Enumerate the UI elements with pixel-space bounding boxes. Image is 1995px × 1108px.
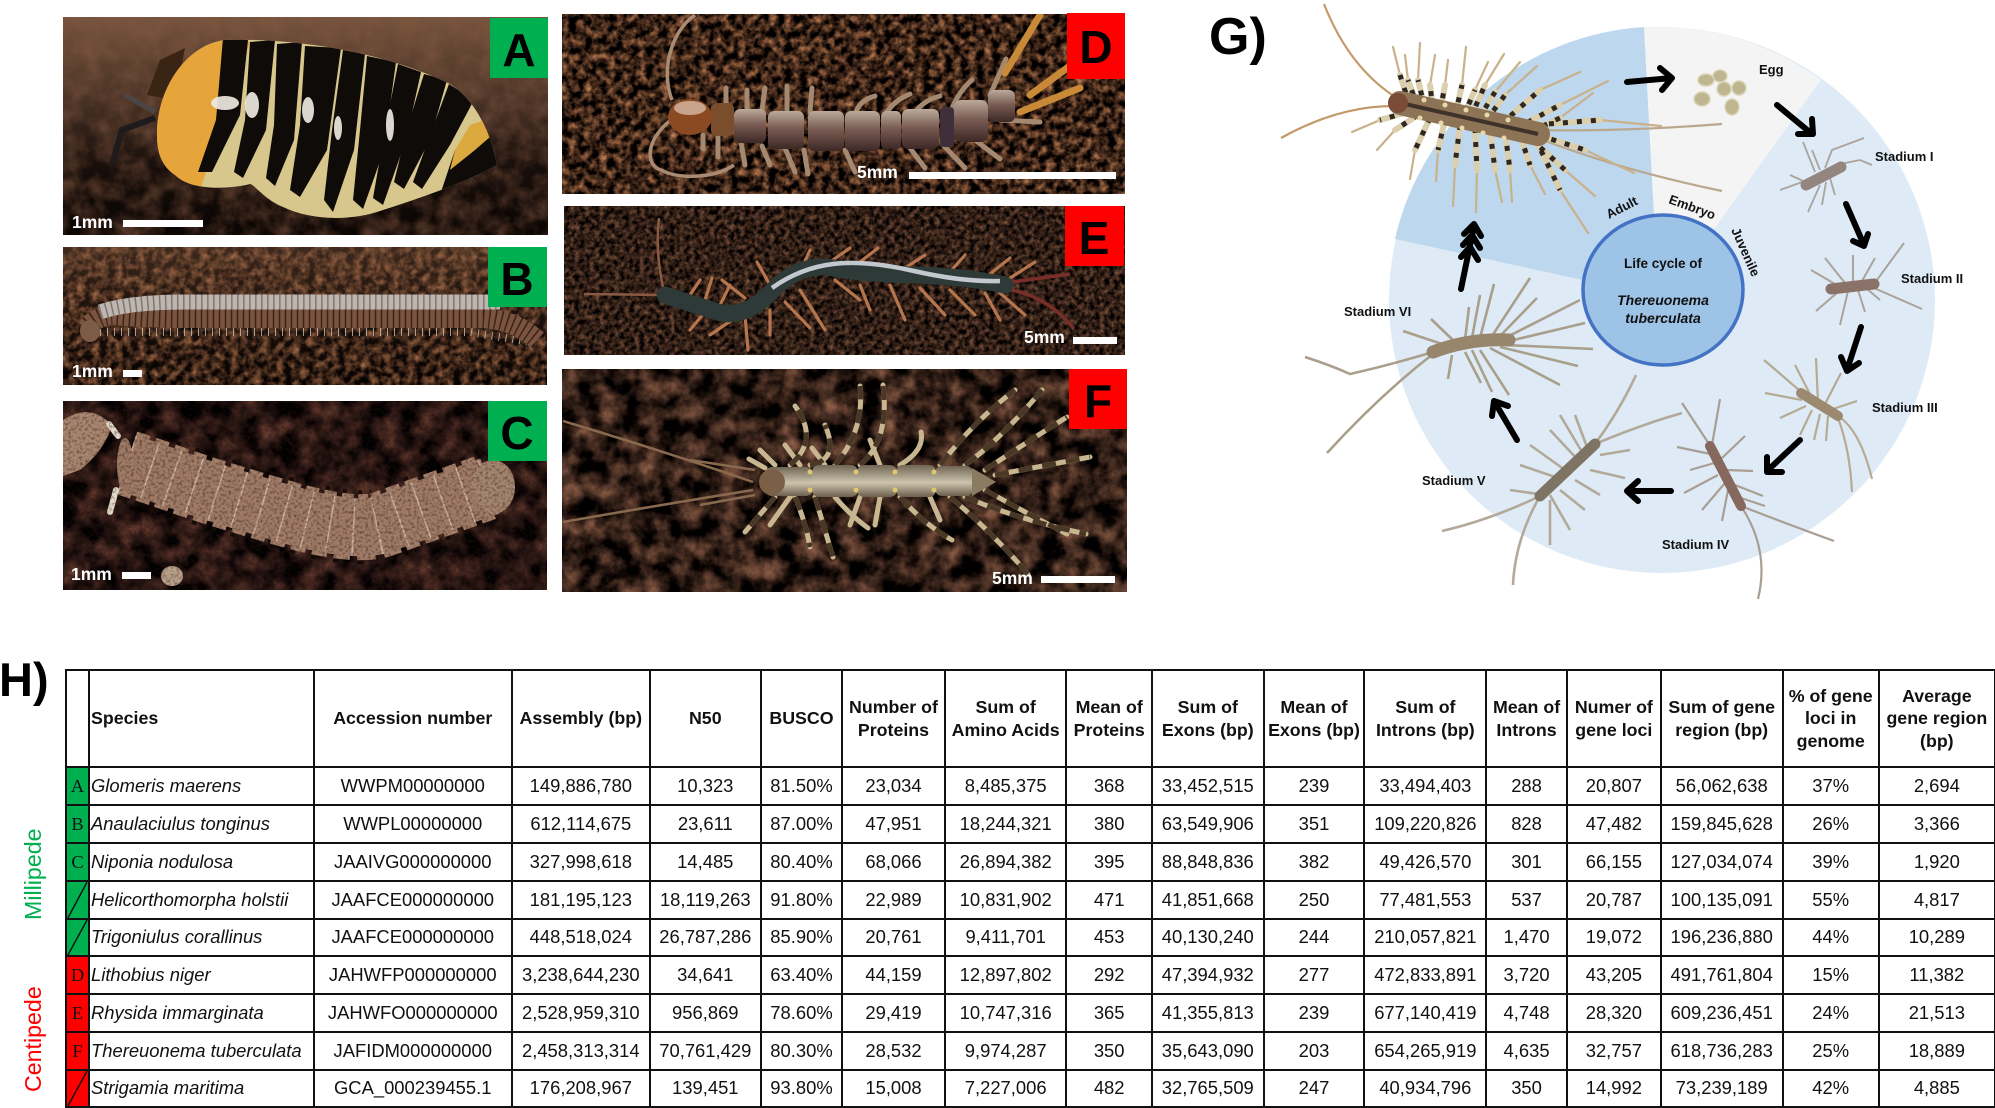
table header row: gene region (1886, 708, 1987, 728)
row: Niponia nodulosa: 127,034,074 (1671, 851, 1773, 872)
stadium I specimen (1780, 138, 1872, 212)
row: Strigamia maritima: Strigamia maritima (91, 1077, 244, 1098)
row: Trigoniulus corallinus: 10,289 (1909, 926, 1965, 947)
row: Niponia nodulosa: 395 (1094, 851, 1125, 872)
triple-headed arrow stadium VI to adult (1461, 224, 1481, 289)
badge E: E (1079, 212, 1109, 264)
table header row: Accession number (333, 708, 492, 728)
arrows between stages (1461, 68, 1868, 501)
row: Lithobius niger: 12,897,802 (960, 964, 1052, 985)
table header row: Mean of (1076, 697, 1143, 717)
adult sector (1395, 27, 1654, 280)
row: Niponia nodulosa: 26,894,382 (960, 851, 1052, 872)
row: Helicorthomorpha holstii: Helicorthomorpha holstii (91, 889, 288, 910)
scale bar A: 1mm (72, 212, 113, 232)
stage names: Adult (1604, 193, 1641, 222)
stadium labels: Stadium III (1872, 400, 1938, 415)
arrow egg to stadium I (1777, 105, 1813, 134)
arrow stadium I to II (1846, 204, 1868, 246)
row: Glomeris maerens: 37% (1812, 775, 1849, 796)
panel C: Niponia nodulosa photo (63, 401, 547, 590)
row: Helicorthomorpha holstii (67, 882, 1960, 918)
stage names (1604, 192, 1763, 279)
row: Rhysida immarginata: 29,419 (865, 1002, 922, 1023)
row: Rhysida immarginata: 41,355,813 (1162, 1002, 1254, 1023)
juvenile sector disc (1389, 27, 1935, 573)
row: Rhysida immarginata: 4,748 (1504, 1002, 1550, 1023)
row: Anaulaciulus tonginus: 159,845,628 (1671, 813, 1773, 834)
badge C (488, 401, 547, 461)
row: Thereuonema tuberculata: 203 (1299, 1040, 1329, 1061)
row: Glomeris maerens: 23,034 (865, 775, 922, 796)
row: Lithobius niger: 43,205 (1586, 964, 1642, 985)
row: Anaulaciulus tonginus: Anaulaciulus tonginus (91, 813, 270, 834)
row: Niponia nodulosa: JAAIVG000000000 (334, 851, 491, 872)
arrow stadium II to III (1841, 327, 1861, 371)
row: Trigoniulus corallinus: 448,518,024 (530, 926, 632, 947)
badge D (1067, 13, 1125, 79)
row: Strigamia maritima: 247 (1299, 1077, 1329, 1098)
row: Lithobius niger: 472,833,891 (1374, 964, 1476, 985)
row: Lithobius niger: 47,394,932 (1162, 964, 1254, 985)
row: Strigamia maritima: 139,451 (672, 1077, 739, 1098)
row: Glomeris maerens (67, 768, 1960, 804)
panel F: Thereuonema tuberculata photo (562, 369, 1127, 592)
table: genome statistics (65, 669, 1995, 1108)
row: Lithobius niger: 11,382 (1909, 964, 1964, 985)
row: Rhysida immarginata: 609,236,451 (1671, 1002, 1773, 1023)
row: Lithobius niger: Lithobius niger (91, 964, 211, 985)
row: Thereuonema tuberculata: Thereuonema tuberculata (91, 1040, 302, 1061)
panel D: Lithobius niger photo (562, 14, 1125, 194)
row: Thereuonema tuberculata: 9,974,287 (965, 1040, 1047, 1061)
row: Lithobius niger: 3,238,644,230 (522, 964, 640, 985)
row: Anaulaciulus tonginus: B (71, 814, 84, 834)
table header row: Sum of (1178, 697, 1238, 717)
row: Glomeris maerens: 56,062,638 (1676, 775, 1768, 796)
row: Lithobius niger: 292 (1094, 964, 1125, 985)
brown centipede (650, 15, 1085, 176)
row: Lithobius niger: 44,159 (865, 964, 922, 985)
row: Lithobius niger: D (71, 965, 84, 985)
row: Rhysida immarginata: 365 (1094, 1002, 1125, 1023)
row: Thereuonema tuberculata: 35,643,090 (1162, 1040, 1254, 1061)
centre circle: Life cycle of (1624, 256, 1703, 271)
row: Anaulaciulus tonginus: 3,366 (1914, 813, 1960, 834)
row: Thereuonema tuberculata (67, 1033, 1965, 1069)
row: Niponia nodulosa (67, 844, 1960, 880)
row: Glomeris maerens: 239 (1299, 775, 1329, 796)
row: Strigamia maritima: 350 (1511, 1077, 1542, 1098)
badge F (1069, 369, 1127, 429)
row: Rhysida immarginata: 21,513 (1909, 1002, 1965, 1023)
row: Glomeris maerens: 2,694 (1914, 775, 1960, 796)
scale bar C: 1mm (71, 564, 112, 584)
row: Helicorthomorpha holstii: 250 (1299, 889, 1329, 910)
row: Lithobius niger: 63.40% (770, 964, 833, 985)
row: Anaulaciulus tonginus: 18,244,321 (960, 813, 1052, 834)
row: Strigamia maritima: 4,885 (1914, 1077, 1960, 1098)
row: Niponia nodulosa: Niponia nodulosa (91, 851, 233, 872)
stadium labels: Egg (1759, 62, 1784, 77)
table header row: % of gene (1789, 686, 1873, 706)
row: Glomeris maerens: 149,886,780 (530, 775, 632, 796)
centre circle: tuberculata (1625, 310, 1701, 326)
row: Trigoniulus corallinus: 40,130,240 (1162, 926, 1254, 947)
row: Thereuonema tuberculata: 4,635 (1504, 1040, 1550, 1061)
row: Anaulaciulus tonginus: 47,951 (865, 813, 922, 834)
row: Trigoniulus corallinus: 210,057,821 (1374, 926, 1476, 947)
table header row (91, 686, 1987, 751)
row: Rhysida immarginata: 24% (1812, 1002, 1849, 1023)
panel B: Anaulaciulus tonginus photo (63, 247, 547, 385)
table header row: Number of (849, 697, 938, 717)
scale bar F: 5mm (992, 568, 1033, 588)
row: Glomeris maerens: 81.50% (770, 775, 833, 796)
arrow stadium V to VI (1492, 401, 1517, 440)
row: Helicorthomorpha holstii: 4,817 (1914, 889, 1960, 910)
stadium VI specimen (1305, 278, 1593, 453)
stadium labels: Stadium I (1875, 149, 1934, 164)
row: Anaulaciulus tonginus: 63,549,906 (1162, 813, 1254, 834)
panel G: life cycle diagram (1281, 4, 1963, 599)
row: Helicorthomorpha holstii: 77,481,553 (1379, 889, 1471, 910)
row: Thereuonema tuberculata: JAFIDM000000000 (334, 1040, 492, 1061)
stadium labels: Stadium V (1422, 473, 1486, 488)
eggs (1694, 70, 1746, 115)
row: Trigoniulus corallinus: 85.90% (770, 926, 833, 947)
table header row: Proteins (858, 720, 929, 740)
badge A: A (502, 24, 536, 76)
row: Thereuonema tuberculata: 654,265,919 (1374, 1040, 1476, 1061)
row: Strigamia maritima: 176,208,967 (530, 1077, 632, 1098)
stadium labels: Stadium VI (1344, 304, 1411, 319)
row: Niponia nodulosa: 1,920 (1914, 851, 1960, 872)
table header row: Exons (bp) (1162, 720, 1254, 740)
row: Trigoniulus corallinus: 19,072 (1586, 926, 1642, 947)
row: Niponia nodulosa: 66,155 (1586, 851, 1642, 872)
badge B (488, 247, 547, 307)
slender millipede body (80, 302, 537, 342)
flat-backed millipede body (63, 412, 515, 586)
stadium V specimen (1442, 375, 1682, 585)
row: Glomeris maerens: WWPM00000000 (341, 775, 485, 796)
row: Thereuonema tuberculata: 28,532 (865, 1040, 922, 1061)
row: Niponia nodulosa: 14,485 (677, 851, 733, 872)
row: Trigoniulus corallinus: 453 (1094, 926, 1125, 947)
row: Strigamia maritima: 42% (1812, 1077, 1849, 1098)
panel A: Glomeris maerens photo (63, 17, 548, 235)
table header row: Mean of (1493, 697, 1560, 717)
scale bar D: 5mm (857, 162, 898, 182)
group label Centipede: Centipede (20, 986, 46, 1092)
table header row: Sum of gene (1668, 697, 1775, 717)
table header row: loci in (1805, 708, 1856, 728)
stadium II specimen (1811, 243, 1922, 325)
stadium labels (1344, 62, 1963, 552)
table header row: Sum of (1395, 697, 1455, 717)
row: Lithobius niger: 277 (1299, 964, 1329, 985)
row: Niponia nodulosa: 327,998,618 (530, 851, 632, 872)
table header row: Introns (1496, 720, 1557, 740)
row: Strigamia maritima: GCA_000239455.1 (334, 1077, 491, 1098)
row: Strigamia maritima: 32,765,509 (1162, 1077, 1254, 1098)
row: Rhysida immarginata: 956,869 (672, 1002, 739, 1023)
row: Rhysida immarginata (67, 995, 1965, 1031)
centre circle (1583, 215, 1743, 365)
scale bar C (71, 564, 151, 584)
row: Strigamia maritima: 482 (1094, 1077, 1125, 1098)
row: Trigoniulus corallinus (67, 920, 1965, 955)
row: Thereuonema tuberculata: 350 (1094, 1040, 1125, 1061)
row: Niponia nodulosa: 49,426,570 (1379, 851, 1471, 872)
house centipede (563, 385, 1090, 574)
arrow stadium IV to V (1627, 481, 1671, 501)
row: Trigoniulus corallinus: 44% (1812, 926, 1849, 947)
row: Niponia nodulosa: 88,848,836 (1162, 851, 1254, 872)
row: Trigoniulus corallinus: 20,761 (865, 926, 922, 947)
row: Strigamia maritima: 7,227,006 (965, 1077, 1047, 1098)
row: Helicorthomorpha holstii: 100,135,091 (1671, 889, 1773, 910)
panel label H: H) (0, 653, 49, 706)
row: Lithobius niger: 15% (1812, 964, 1849, 985)
dark centipede (584, 218, 1074, 350)
badge B: B (500, 253, 534, 305)
row: Glomeris maerens: 33,452,515 (1162, 775, 1254, 796)
panel label G: G) (1209, 8, 1267, 66)
stadium IV specimen (1677, 399, 1834, 599)
row: Anaulaciulus tonginus: 351 (1299, 813, 1329, 834)
row: Strigamia maritima (67, 1071, 1960, 1106)
row: Niponia nodulosa: 68,066 (865, 851, 922, 872)
row: Helicorthomorpha holstii: 10,831,902 (960, 889, 1052, 910)
row: Anaulaciulus tonginus: 26% (1812, 813, 1849, 834)
table header row: Average (1902, 686, 1972, 706)
row: Anaulaciulus tonginus (67, 806, 1960, 842)
row: Rhysida immarginata: 10,747,316 (960, 1002, 1052, 1023)
row: Trigoniulus corallinus: 9,411,701 (965, 926, 1046, 947)
row: Anaulaciulus tonginus: 47,482 (1586, 813, 1642, 834)
scale bar D (857, 162, 1116, 182)
row: Thereuonema tuberculata: 2,458,313,314 (522, 1040, 640, 1061)
row: Anaulaciulus tonginus: 380 (1094, 813, 1125, 834)
row: Strigamia maritima: 93.80% (770, 1077, 833, 1098)
pill millipede body (112, 38, 505, 218)
row: Thereuonema tuberculata: 25% (1812, 1040, 1849, 1061)
row: Trigoniulus corallinus: 244 (1299, 926, 1329, 947)
badge C: C (500, 407, 534, 459)
row: Trigoniulus corallinus: Trigoniulus corallinus (91, 926, 262, 947)
table header row: BUSCO (769, 708, 834, 728)
row: Thereuonema tuberculata: 18,889 (1909, 1040, 1965, 1061)
row: Glomeris maerens: A (71, 776, 84, 796)
scale bar B: 1mm (72, 361, 113, 381)
row: Helicorthomorpha holstii: 20,787 (1586, 889, 1642, 910)
row: Helicorthomorpha holstii: 55% (1812, 889, 1849, 910)
table header row: Proteins (1074, 720, 1145, 740)
row: Glomeris maerens: Glomeris maerens (91, 775, 241, 796)
row: Rhysida immarginata: Rhysida immarginata (91, 1002, 264, 1023)
row: Anaulaciulus tonginus: 612,114,675 (530, 813, 631, 834)
row: Lithobius niger: 491,761,804 (1671, 964, 1773, 985)
row: Niponia nodulosa: 39% (1812, 851, 1849, 872)
stage names: Juvenile (1728, 225, 1763, 279)
row: Trigoniulus corallinus: 196,236,880 (1671, 926, 1773, 947)
table header row: Species (91, 708, 158, 728)
badge F: F (1084, 375, 1112, 427)
row: Helicorthomorpha holstii: 22,989 (865, 889, 922, 910)
row: Anaulaciulus tonginus: 828 (1511, 813, 1542, 834)
table header row: Amino Acids (952, 720, 1060, 740)
table header row: region (bp) (1675, 720, 1768, 740)
scale bar E: 5mm (1024, 327, 1065, 347)
row: Thereuonema tuberculata: 70,761,429 (659, 1040, 751, 1061)
row: Thereuonema tuberculata: 80.30% (770, 1040, 833, 1061)
row: Anaulaciulus tonginus: WWPL00000000 (343, 813, 482, 834)
row: Rhysida immarginata: 677,140,419 (1374, 1002, 1476, 1023)
panel E: Rhysida immarginata photo (564, 206, 1125, 355)
stadium III specimen (1764, 358, 1872, 492)
row: Thereuonema tuberculata: 32,757 (1586, 1040, 1642, 1061)
badge A (490, 18, 548, 78)
table header row: Exons (bp) (1268, 720, 1360, 740)
row: Helicorthomorpha holstii: 181,195,123 (530, 889, 632, 910)
row: Thereuonema tuberculata: F (72, 1041, 83, 1061)
row: Rhysida immarginata: 28,320 (1586, 1002, 1642, 1023)
badge E (1065, 206, 1124, 266)
row: Anaulaciulus tonginus: 87.00% (770, 813, 833, 834)
table header row: Assembly (bp) (520, 708, 642, 728)
row: Glomeris maerens: 8,485,375 (965, 775, 1047, 796)
arrow stadium III to IV (1767, 440, 1800, 472)
row: Lithobius niger: 3,720 (1504, 964, 1550, 985)
table header row: gene loci (1575, 720, 1652, 740)
row: Trigoniulus corallinus: JAAFCE000000000 (331, 926, 494, 947)
row: Anaulaciulus tonginus: 23,611 (678, 813, 733, 834)
scale bar E (1024, 327, 1117, 347)
stage names: Embryo (1667, 192, 1718, 222)
centre circle: Thereuonema (1617, 292, 1709, 308)
row: Helicorthomorpha holstii: 18,119,263 (660, 889, 751, 910)
table header row: N50 (689, 708, 722, 728)
row: Helicorthomorpha holstii: JAAFCE000000000 (331, 889, 494, 910)
table header row: (bp) (1920, 731, 1954, 751)
row: Niponia nodulosa: 301 (1511, 851, 1542, 872)
table header row: Sum of (976, 697, 1036, 717)
row: Helicorthomorpha holstii: 91.80% (770, 889, 833, 910)
stadium labels: Stadium IV (1662, 537, 1730, 552)
row: Anaulaciulus tonginus: 109,220,826 (1374, 813, 1476, 834)
row: Glomeris maerens: 368 (1094, 775, 1125, 796)
row: Niponia nodulosa: C (71, 852, 84, 872)
adult centipede (1281, 4, 1722, 233)
stadium labels: Stadium II (1901, 271, 1963, 286)
row: Strigamia maritima: 73,239,189 (1676, 1077, 1768, 1098)
scale bar F (992, 568, 1115, 588)
row: Rhysida immarginata: 239 (1299, 1002, 1329, 1023)
row: Lithobius niger: JAHWFP000000000 (329, 964, 497, 985)
arrow adult to egg (1627, 68, 1672, 90)
row: Rhysida immarginata: 2,528,959,310 (522, 1002, 640, 1023)
group label Millipede: Millipede (20, 828, 46, 920)
row: Glomeris maerens: 10,323 (677, 775, 733, 796)
row: Strigamia maritima: 15,008 (865, 1077, 922, 1098)
row: Thereuonema tuberculata: 618,736,283 (1671, 1040, 1773, 1061)
badge D: D (1079, 21, 1113, 73)
row: Niponia nodulosa: 80.40% (770, 851, 833, 872)
table header row: genome (1797, 731, 1865, 751)
row: Strigamia maritima: 14,992 (1586, 1077, 1642, 1098)
row: Rhysida immarginata: JAHWFO000000000 (328, 1002, 498, 1023)
row: Glomeris maerens: 20,807 (1586, 775, 1642, 796)
row: Helicorthomorpha holstii: 471 (1094, 889, 1125, 910)
embryo sector (1644, 27, 1821, 228)
row: Glomeris maerens: 288 (1511, 775, 1542, 796)
scale bar B (72, 361, 142, 381)
row: Trigoniulus corallinus: 26,787,286 (659, 926, 751, 947)
row: Niponia nodulosa: 382 (1299, 851, 1329, 872)
table header row: Introns (bp) (1376, 720, 1475, 740)
row: Lithobius niger: 34,641 (677, 964, 733, 985)
row: Rhysida immarginata: 78.60% (770, 1002, 833, 1023)
row: Helicorthomorpha holstii: 41,851,668 (1162, 889, 1254, 910)
row: Helicorthomorpha holstii: 537 (1511, 889, 1542, 910)
row: Strigamia maritima: 40,934,796 (1379, 1077, 1471, 1098)
row: Trigoniulus corallinus: 1,470 (1504, 926, 1550, 947)
row: Lithobius niger (67, 957, 1964, 993)
scale bar A (72, 212, 203, 232)
table header row: Numer of (1575, 697, 1653, 717)
table header row: Mean of (1280, 697, 1348, 717)
row: Glomeris maerens: 33,494,403 (1379, 775, 1471, 796)
row: Rhysida immarginata: E (72, 1003, 83, 1023)
